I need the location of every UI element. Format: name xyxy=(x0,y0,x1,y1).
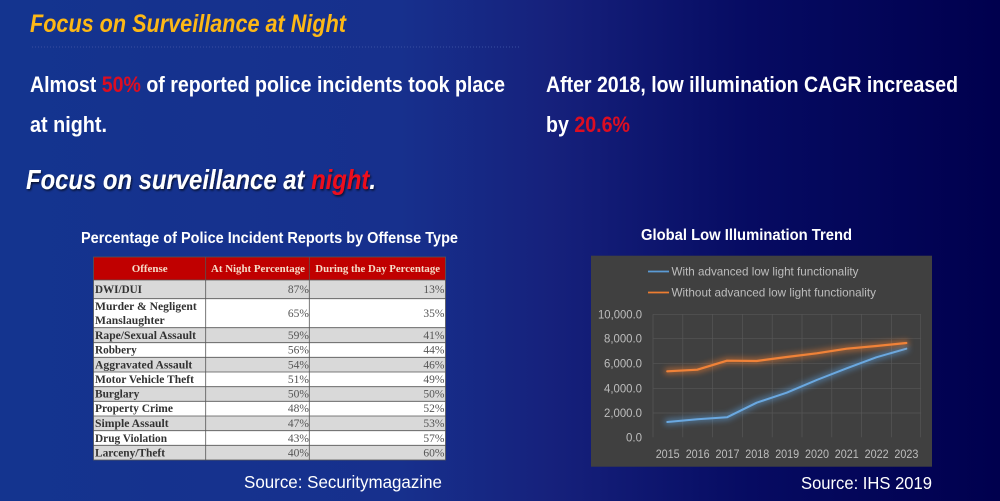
table rows: 60% xyxy=(423,448,445,460)
x axis labels: 2016 xyxy=(686,447,710,461)
table rows: Larceny/Theft xyxy=(95,448,165,460)
table rows: 35% xyxy=(423,308,445,320)
x axis labels: 2020 xyxy=(805,447,829,461)
chart legend xyxy=(648,264,876,300)
text block: CAGR statistic: by 20.6% xyxy=(546,112,630,137)
chart legend: Without advanced low light functionality xyxy=(672,286,876,300)
y axis labels: 10,000.0 xyxy=(598,308,642,322)
table rows: Drug Violation xyxy=(95,433,168,445)
table heading: Percentage of Police Incident Reports by Offense Type xyxy=(81,230,458,247)
y axis labels xyxy=(598,308,642,444)
table rows: 46% xyxy=(423,360,445,372)
table header row: At Night Percentage xyxy=(211,263,305,275)
table rows: Motor Vehicle Theft xyxy=(95,374,194,386)
text block: police incidents statistic: at night. xyxy=(30,112,107,137)
table rows: 43% xyxy=(288,433,309,445)
table header row: During the Day Percentage xyxy=(315,263,440,275)
table rows: 47% xyxy=(288,418,309,430)
x axis labels: 2021 xyxy=(835,447,859,461)
table rows: 56% xyxy=(288,344,309,356)
text block: police incidents statistic: Almost 50% of reported police incidents took place xyxy=(30,72,505,97)
chart legend: With advanced low light functionality xyxy=(672,264,858,278)
table: police incident reports xyxy=(94,257,446,460)
table rows: 57% xyxy=(423,433,445,445)
x axis labels xyxy=(656,447,919,461)
table rows xyxy=(94,257,446,460)
table rows: 48% xyxy=(288,403,309,415)
table source: Source: Securitymagazine xyxy=(244,472,442,492)
table rows: Robbery xyxy=(95,344,137,356)
table rows: 52% xyxy=(423,403,445,415)
table rows: 50% xyxy=(423,388,445,400)
table header row: Offense xyxy=(132,263,168,275)
y axis labels: 2,000.0 xyxy=(604,406,642,420)
table rows: Burglary xyxy=(95,388,140,400)
y axis labels: 6,000.0 xyxy=(604,356,642,370)
x axis labels: 2015 xyxy=(656,447,680,461)
table rows: 51% xyxy=(288,374,309,386)
y axis labels: 4,000.0 xyxy=(604,382,642,396)
x axis labels: 2022 xyxy=(865,447,889,461)
table rows: Manslaughter xyxy=(95,315,165,327)
table rows: Aggravated Assault xyxy=(95,360,192,372)
table rows: Simple Assault xyxy=(95,418,169,430)
table rows: Property Crime xyxy=(95,403,173,415)
line chart: low illumination trend xyxy=(591,256,932,467)
y axis labels: 0.0 xyxy=(626,430,642,444)
x axis labels: 2018 xyxy=(745,447,770,461)
table rows: 53% xyxy=(423,418,445,430)
x axis labels: 2019 xyxy=(775,447,799,461)
line: with advanced low light functionality xyxy=(667,349,906,422)
table rows: 50% xyxy=(288,388,309,400)
chart heading: Global Low Illumination Trend xyxy=(641,227,852,244)
chart panel xyxy=(591,256,932,467)
table header row xyxy=(94,257,446,280)
table rows: 49% xyxy=(423,374,445,386)
table rows: 65% xyxy=(288,308,309,320)
chart source: Source: IHS 2019 xyxy=(801,473,932,493)
table rows: 87% xyxy=(288,284,309,296)
table rows: 59% xyxy=(288,330,309,342)
heading: focus on surveillance at night: Focus on surveillance at night. xyxy=(26,164,376,195)
table rows: 40% xyxy=(288,448,309,460)
table rows: Rape/Sexual Assault xyxy=(95,330,196,342)
line: without advanced low light functionality xyxy=(667,343,906,371)
y axis labels: 8,000.0 xyxy=(604,332,642,346)
text block: CAGR statistic xyxy=(546,72,958,137)
x axis labels: 2017 xyxy=(716,447,740,461)
table rows: 13% xyxy=(423,284,445,296)
text block: police incidents statistic xyxy=(30,72,505,137)
x axis labels: 2023 xyxy=(894,447,919,461)
table rows: DWI/DUI xyxy=(95,284,143,296)
table rows: 44% xyxy=(423,344,445,356)
table rows: 54% xyxy=(288,360,309,372)
title: Focus on Surveillance at Night xyxy=(30,10,347,38)
table rows: 41% xyxy=(423,330,445,342)
table rows: Murder & Negligent xyxy=(95,301,197,313)
